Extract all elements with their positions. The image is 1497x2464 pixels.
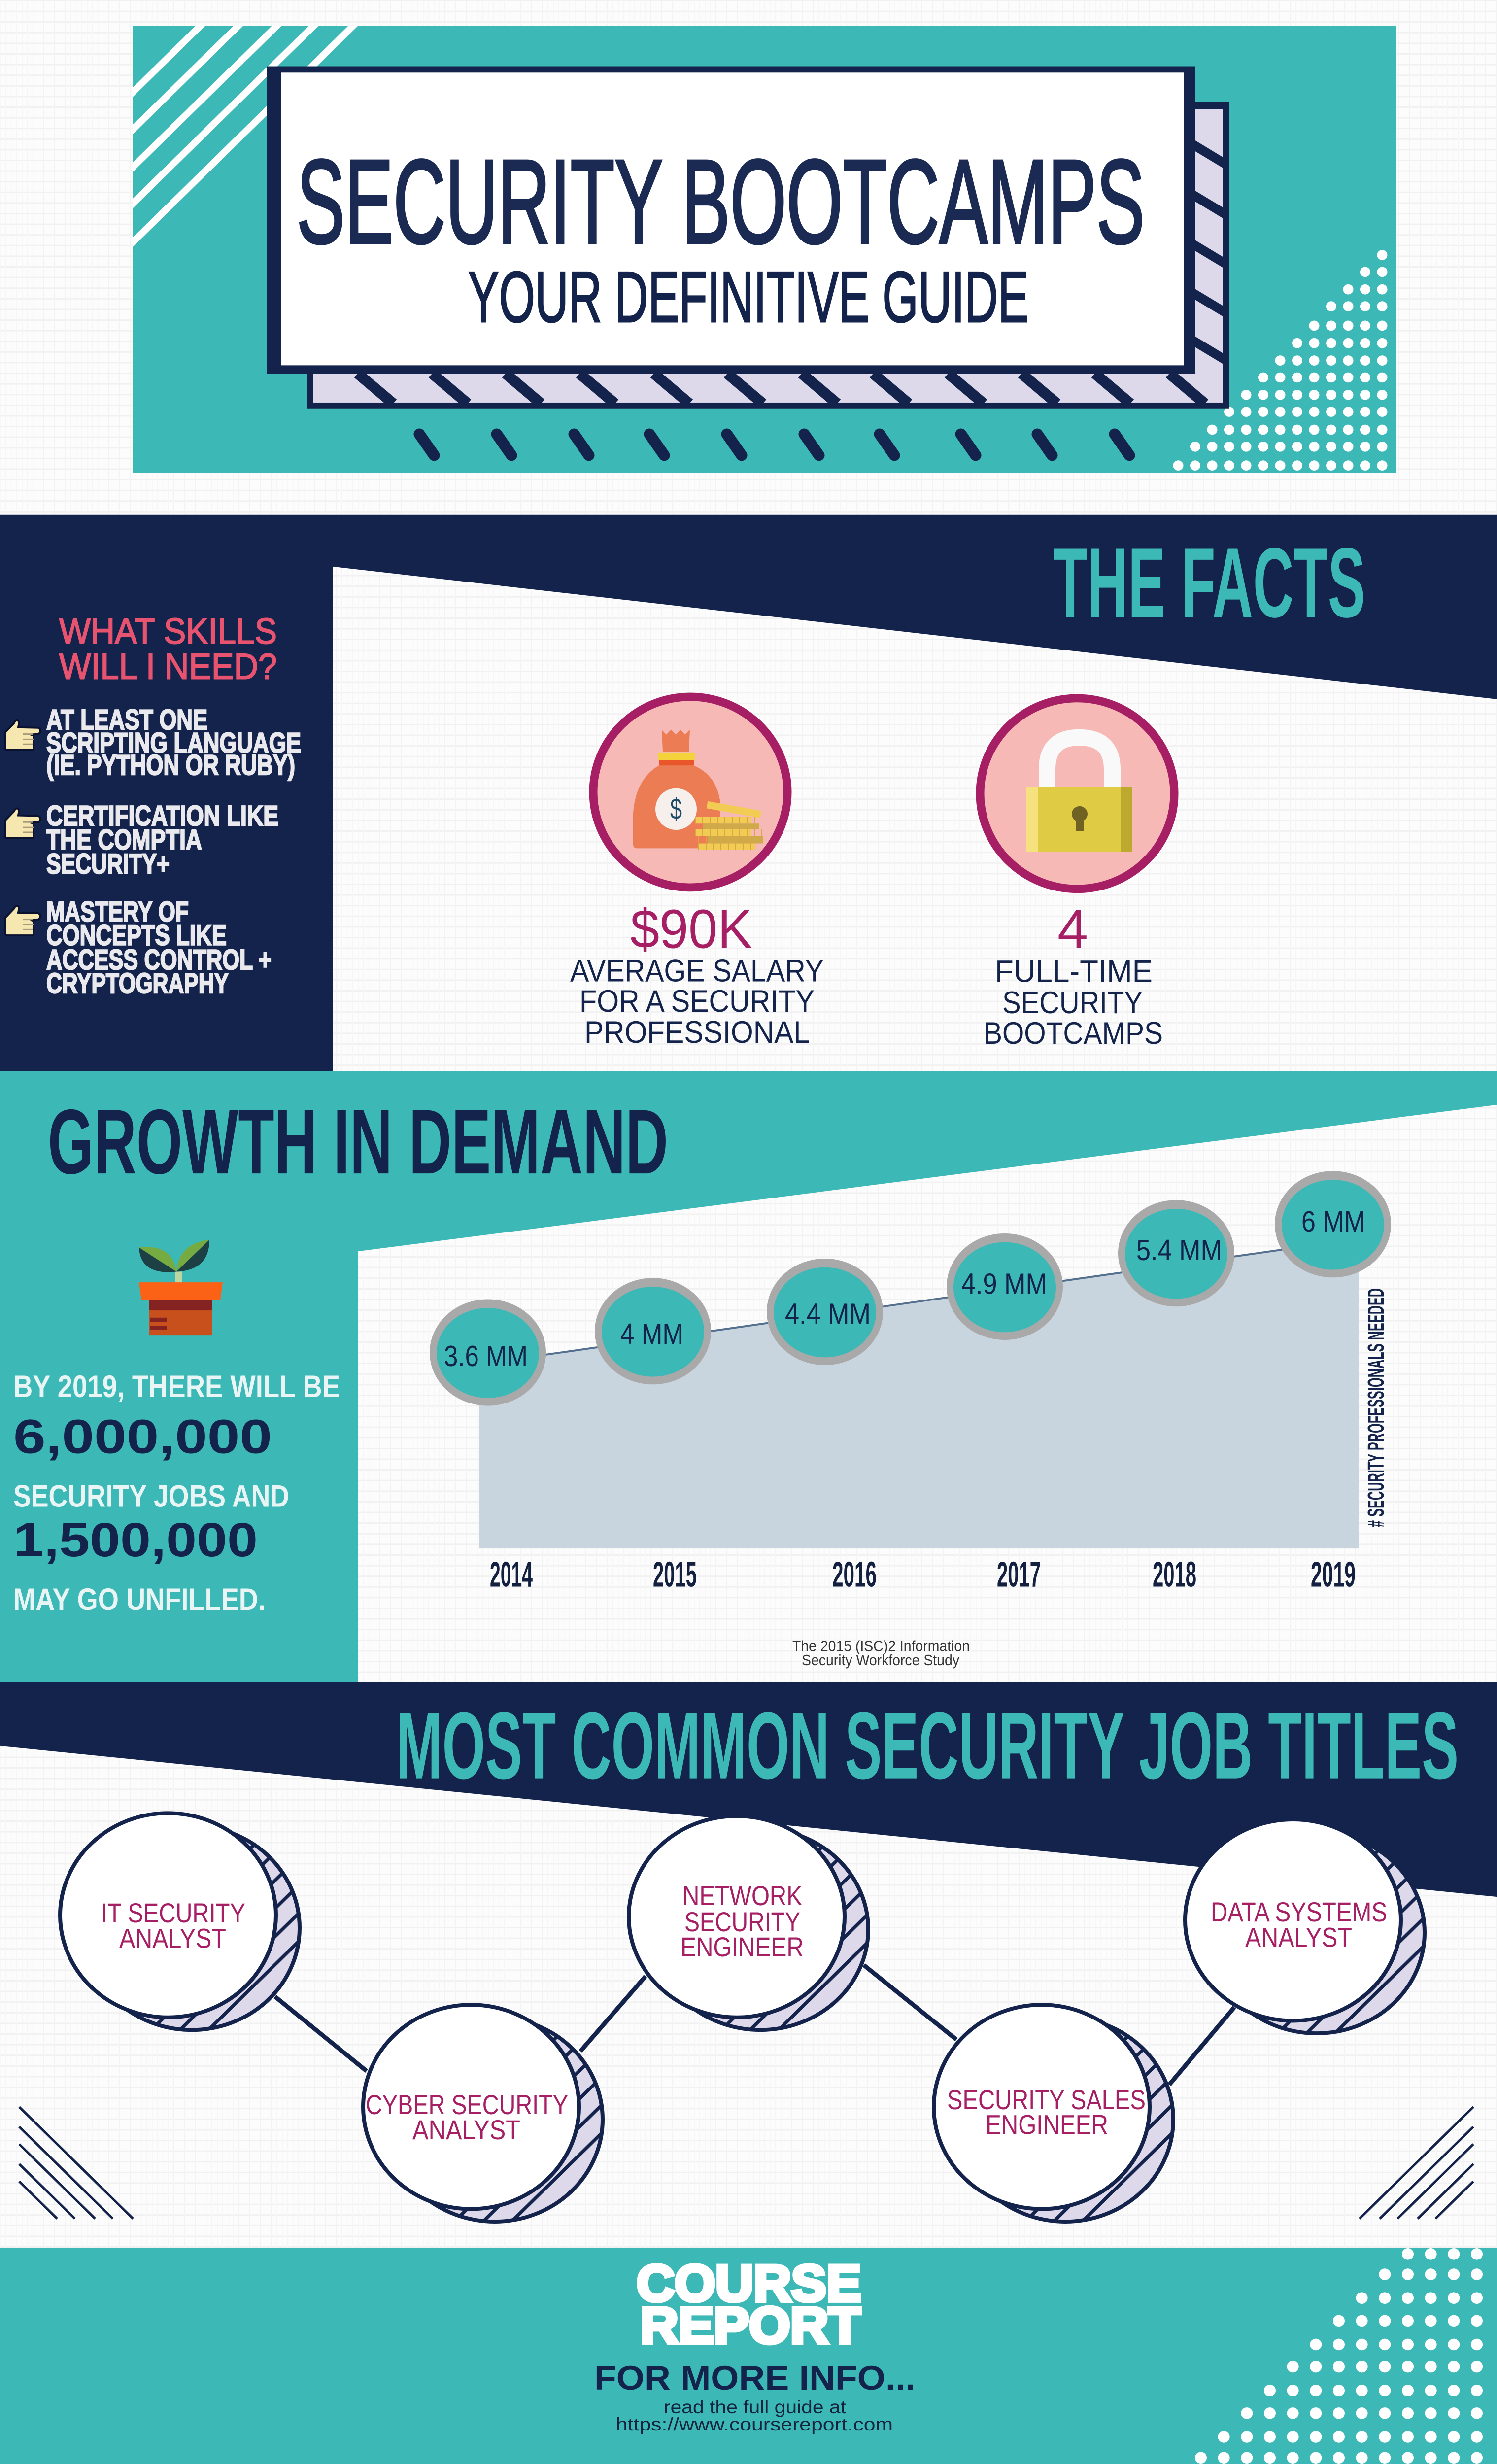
skill list: SECURITY+	[46, 848, 170, 880]
skill list: CRYPTOGRAPHY	[46, 967, 229, 999]
job: network security engineer: SECURITY	[684, 1906, 800, 1937]
stat: average salary: $90K	[630, 899, 752, 959]
connector lines	[275, 1965, 1234, 2085]
source note	[792, 1638, 970, 1669]
panel: footer	[0, 2248, 1497, 2464]
y axis label: # SECURITY PROFESSIONALS NEEDED	[1363, 1288, 1389, 1527]
data point 2014	[430, 1299, 546, 1406]
heading: growth in demand: GROWTH IN DEMAND	[48, 1091, 668, 1193]
x axis years: 2015	[653, 1554, 697, 1595]
logo: course report: COURSE	[637, 2255, 861, 2312]
data point 2015	[595, 1278, 711, 1384]
skill list: ACCESS CONTROL +	[46, 944, 272, 976]
logo: course report: REPORT	[640, 2297, 861, 2354]
stat: average salary: FOR A SECURITY	[579, 985, 815, 1019]
data point 2018	[1118, 1200, 1234, 1306]
skills heading: WHAT SKILLS	[59, 611, 277, 651]
x axis years: 2018	[1153, 1554, 1196, 1595]
row of navy dashes	[419, 434, 1129, 455]
job: cyber security analyst	[363, 2005, 603, 2222]
x axis years: 2017	[997, 1554, 1041, 1595]
job: it security analyst: IT SECURITY	[101, 1898, 245, 1928]
panel: hero banner	[123, 19, 1396, 473]
job: data systems analyst: ANALYST	[1245, 1922, 1352, 1952]
link text	[616, 2396, 893, 2434]
logo: course report	[637, 2255, 861, 2354]
coins	[695, 805, 763, 850]
job: security sales engineer: SECURITY SALES	[947, 2085, 1146, 2115]
skill list: CONCEPTS LIKE	[46, 920, 227, 952]
data point 2018: 5.4 MM	[1136, 1233, 1222, 1266]
skills heading: WILL I NEED?	[59, 646, 277, 687]
icon: money bag: $	[670, 792, 682, 825]
area chart	[430, 1171, 1391, 1595]
source note: Security Workforce Study	[802, 1651, 960, 1669]
panel: growth in demand	[0, 1071, 1497, 1682]
data point 2017	[947, 1233, 1063, 1340]
skill list: CERTIFICATION LIKE	[46, 800, 278, 832]
job: data systems analyst: DATA SYSTEMS	[1211, 1897, 1387, 1927]
corner hatching left	[19, 2107, 133, 2219]
title box	[267, 67, 1195, 374]
icon: pointing hand 3	[5, 906, 40, 935]
stat: full-time bootcamps: BOOTCAMPS	[984, 1017, 1163, 1051]
link text: read the full guide at	[664, 2396, 847, 2417]
x axis years: 2019	[1311, 1554, 1356, 1595]
x axis years: 2014	[490, 1554, 533, 1595]
stat text block: 1,500,000	[13, 1513, 258, 1567]
job: cyber security analyst: ANALYST	[412, 2115, 520, 2145]
diagonal white stripes	[123, 19, 360, 252]
stat text block: BY 2019, THERE WILL BE	[13, 1369, 340, 1404]
stat: full-time bootcamps: SECURITY	[1002, 986, 1143, 1020]
stat: average salary: AVERAGE SALARY	[570, 954, 824, 988]
icon: padlock	[980, 698, 1174, 889]
data point 2019: 6 MM	[1301, 1205, 1365, 1238]
job: security sales engineer	[934, 2005, 1173, 2222]
job: security sales engineer: ENGINEER	[986, 2109, 1108, 2140]
stat: full-time bootcamps: FULL-TIME	[995, 955, 1153, 989]
job: it security analyst: ANALYST	[119, 1923, 226, 1953]
link text: https://www.coursereport.com	[616, 2414, 893, 2434]
subtitle: YOUR DEFINITIVE GUIDE	[468, 257, 1029, 338]
source note: The 2015 (ISC)2 Information	[792, 1638, 970, 1654]
icon: potted plant	[139, 1240, 223, 1335]
skills heading	[59, 611, 277, 687]
data point 2016: 4.4 MM	[785, 1298, 871, 1330]
skill list	[46, 704, 301, 999]
job: data systems analyst	[1185, 1819, 1425, 2033]
dot pattern	[1200, 2254, 1477, 2458]
skill list: SCRIPTING LANGUAGE	[46, 727, 301, 759]
data point 2017: 4.9 MM	[961, 1267, 1047, 1300]
icon: money bag	[593, 697, 787, 888]
stat: full-time bootcamps	[984, 899, 1163, 1051]
stat: average salary	[570, 899, 824, 1050]
job: cyber security analyst: CYBER SECURITY	[366, 2089, 568, 2120]
panel: the facts	[0, 515, 1497, 1071]
icon: pointing hand 1	[5, 720, 40, 750]
dot triangle	[1178, 255, 1382, 466]
skill list: MASTERY OF	[46, 896, 189, 927]
panel: job titles	[0, 1682, 1497, 2222]
x axis years	[490, 1554, 1356, 1595]
stat: average salary: PROFESSIONAL	[584, 1016, 810, 1050]
skill list: THE COMPTIA	[46, 824, 202, 856]
stat text block: SECURITY JOBS AND	[13, 1479, 289, 1514]
back striped frame	[307, 102, 1229, 409]
call to action: FOR MORE INFO...	[594, 2359, 916, 2397]
stat text block: MAY GO UNFILLED.	[13, 1582, 266, 1617]
stat text block: 6,000,000	[13, 1410, 272, 1464]
data point 2019	[1275, 1171, 1391, 1277]
skill list: (IE. PYTHON OR RUBY)	[46, 750, 295, 781]
x axis years: 2016	[832, 1554, 877, 1595]
icon: pointing hand 2	[5, 808, 40, 838]
stat text block	[13, 1369, 340, 1617]
skill list: AT LEAST ONE	[46, 704, 207, 736]
stat: full-time bootcamps: 4	[1057, 899, 1088, 959]
data point 2015: 4 MM	[620, 1317, 683, 1350]
job: it security analyst	[60, 1813, 300, 2030]
job: network security engineer: NETWORK	[682, 1880, 802, 1911]
corner hatching right	[1360, 2107, 1473, 2219]
job: network security engineer	[629, 1816, 868, 2030]
data point 2014: 3.6 MM	[444, 1339, 528, 1372]
data point 2016	[767, 1259, 883, 1365]
job: network security engineer: ENGINEER	[680, 1931, 804, 1962]
